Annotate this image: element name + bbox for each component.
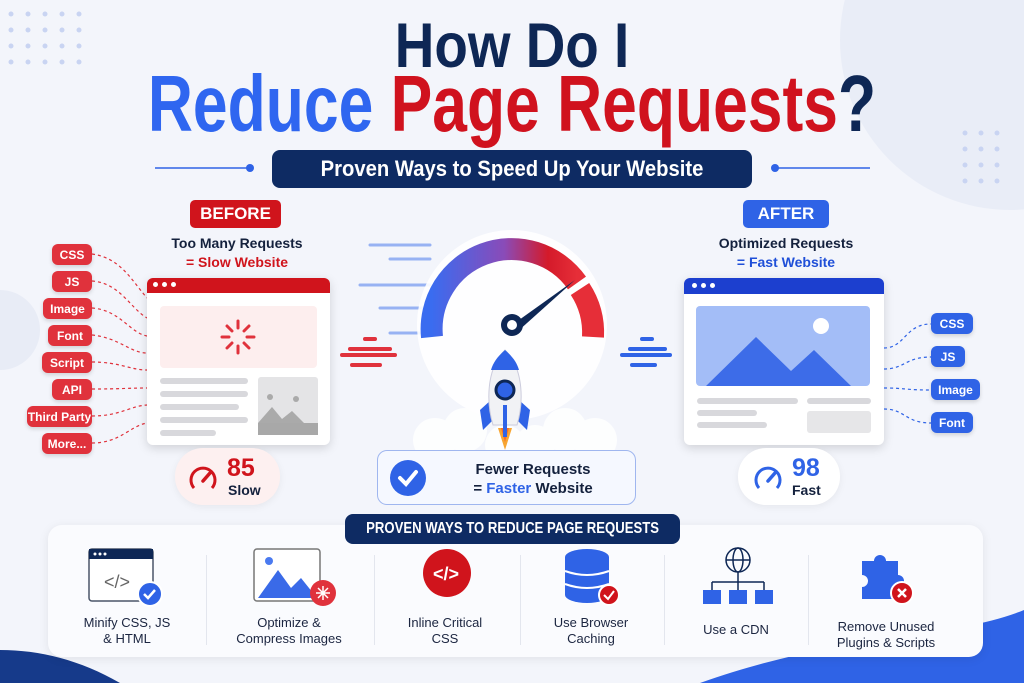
label: inline css: Inline Critical xyxy=(408,615,482,630)
request tags: CSS xyxy=(60,248,84,262)
label: minify xyxy=(84,615,170,646)
icon: database xyxy=(565,549,618,604)
fast score badge: 98 xyxy=(792,454,820,482)
icon: cdn network xyxy=(703,547,773,604)
after section xyxy=(680,200,982,506)
title xyxy=(148,11,876,148)
before section xyxy=(26,200,334,506)
label: cdn: Use a CDN xyxy=(703,622,769,637)
label: remove plugins: Remove Unused xyxy=(838,619,934,634)
before pill xyxy=(190,200,281,228)
after pill xyxy=(743,200,829,228)
after caption: = Fast Website xyxy=(737,254,835,270)
fast score badge xyxy=(738,448,840,505)
label: caching: Caching xyxy=(567,631,615,646)
dividers xyxy=(206,555,207,645)
icon: code window xyxy=(88,548,161,605)
before section: More... xyxy=(48,436,86,450)
fast score badge: Fast xyxy=(792,482,821,498)
after section: Image xyxy=(938,382,973,396)
icon: inline css: </> xyxy=(433,564,459,584)
label: remove plugins xyxy=(837,619,935,650)
before pill: BEFORE xyxy=(200,204,271,223)
label: minify: Minify CSS, JS xyxy=(84,615,170,630)
fewer requests callout: Fewer Requests xyxy=(475,461,591,478)
request tags xyxy=(52,244,92,265)
before caption xyxy=(171,235,303,270)
icon: inline css xyxy=(423,549,471,597)
slow score badge: Slow xyxy=(228,482,261,498)
label: caching: Use Browser xyxy=(554,615,628,630)
after caption: Optimized Requests xyxy=(719,235,853,251)
subtitle pill xyxy=(272,150,752,188)
after section: JS xyxy=(941,350,955,364)
speedometer gauge xyxy=(417,230,607,418)
speed lines right xyxy=(620,337,672,367)
label: optimize images: Compress Images xyxy=(236,631,342,646)
before section: Font xyxy=(57,328,83,342)
label: caching xyxy=(554,615,628,646)
optimized tags: CSS xyxy=(940,316,964,330)
after pill: AFTER xyxy=(758,204,814,223)
slow score badge: 85 xyxy=(227,454,255,482)
slow browser window xyxy=(147,278,330,445)
label: inline css: CSS xyxy=(432,631,458,646)
icon: puzzle remove xyxy=(862,555,912,603)
before section: JS xyxy=(65,274,79,288)
before section: Third Party xyxy=(28,410,91,424)
after section: Font xyxy=(939,416,965,430)
bottom heading pill xyxy=(345,514,680,544)
bottom heading pill: PROVEN WAYS TO REDUCE PAGE REQUESTS xyxy=(366,520,659,537)
label: optimize images: Optimize & xyxy=(257,615,321,630)
fewer requests callout xyxy=(377,450,636,505)
icon: code window: </> xyxy=(104,572,130,592)
optimized tags xyxy=(931,313,973,334)
optimized connectors xyxy=(884,323,931,424)
subtitle pill: Proven Ways to Speed Up Your Website xyxy=(321,156,703,181)
before section: Script xyxy=(50,356,84,370)
fewer requests callout: = Faster Website xyxy=(473,480,593,497)
label: remove plugins: Plugins & Scripts xyxy=(837,635,935,650)
title: How Do I xyxy=(395,11,629,81)
title: Reduce Page Requests? xyxy=(148,59,876,148)
label: minify: & HTML xyxy=(103,631,151,646)
after caption xyxy=(719,235,853,270)
slow score badge xyxy=(175,448,280,505)
label: optimize images xyxy=(236,615,342,646)
before section: Image xyxy=(50,302,85,316)
fast browser window xyxy=(684,278,884,445)
speed lines left xyxy=(358,244,432,334)
before section: API xyxy=(62,382,82,396)
request connectors xyxy=(92,253,147,444)
before caption: Too Many Requests xyxy=(171,235,303,251)
rocket xyxy=(413,350,617,450)
icon: image compress xyxy=(253,548,336,606)
label: inline css xyxy=(408,615,482,646)
before caption: = Slow Website xyxy=(186,254,288,270)
panel: proven ways xyxy=(48,525,983,657)
